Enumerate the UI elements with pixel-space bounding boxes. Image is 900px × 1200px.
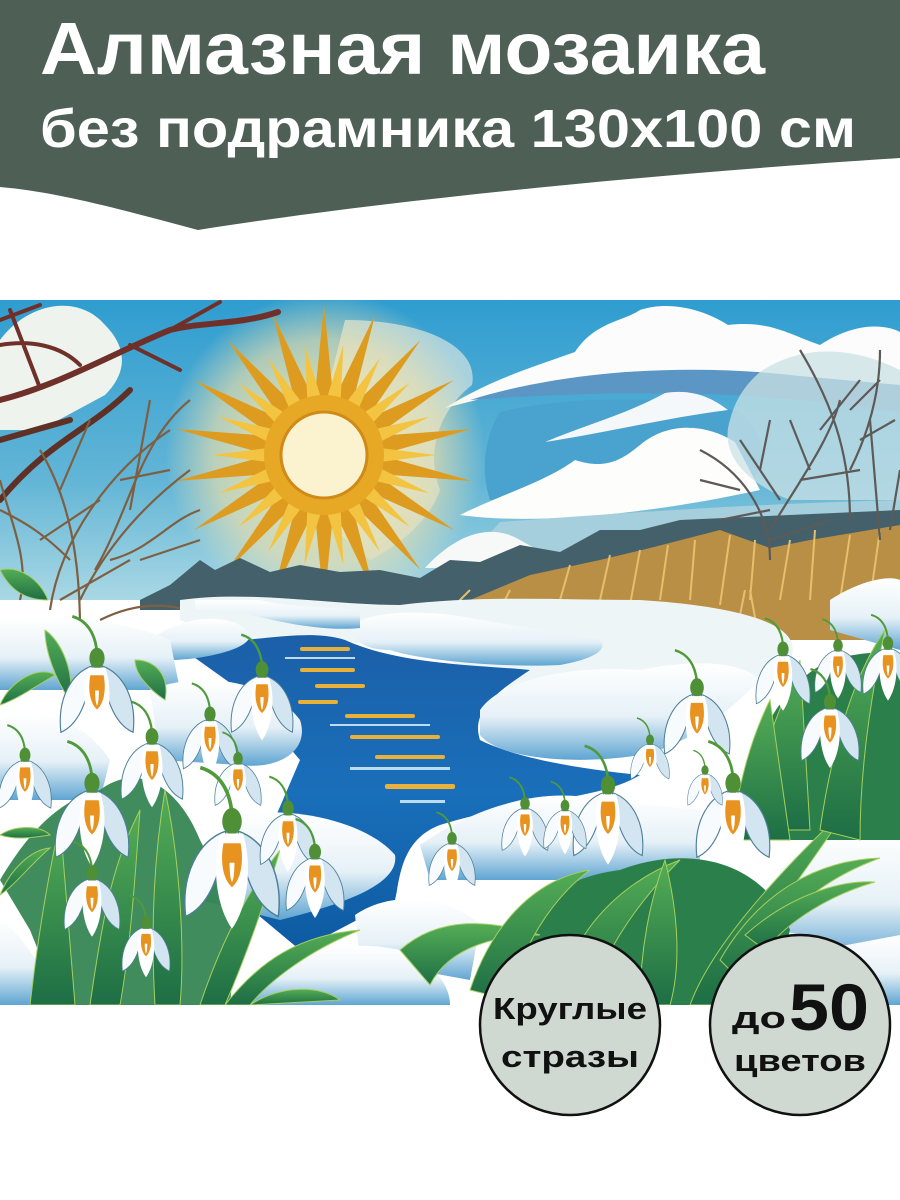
snow banks far — [180, 596, 793, 688]
river — [170, 635, 640, 950]
sun disc — [281, 412, 367, 498]
sky — [0, 300, 900, 600]
illustration: spring landscape — [0, 292, 900, 1005]
badge: up to 50 colours: цветов — [734, 1043, 866, 1078]
snowdrops right — [429, 615, 900, 891]
header banner — [0, 0, 900, 230]
sun — [169, 300, 481, 576]
badge: up to 50 colours — [710, 935, 890, 1115]
badge: up to 50 colours: 50 — [789, 970, 869, 1044]
trees right — [700, 350, 900, 560]
clouds — [0, 306, 900, 568]
badge: round rhinestones — [480, 935, 660, 1115]
badge: up to 50 colours: до — [732, 1000, 786, 1035]
subtitle: без подрамника 130x100 см — [40, 99, 856, 159]
golden reeds — [470, 525, 900, 640]
snow islands — [0, 578, 900, 1005]
badge: round rhinestones: Круглые — [493, 991, 647, 1026]
grass masses — [0, 652, 900, 1005]
sun reflections — [298, 647, 455, 789]
snowdrops left — [0, 616, 344, 977]
tree branches left — [0, 302, 278, 500]
title: Алмазная мозаика — [40, 7, 766, 90]
far forest — [140, 510, 900, 610]
grass leaves — [0, 569, 885, 1005]
badge: round rhinestones: стразы — [501, 1039, 639, 1074]
